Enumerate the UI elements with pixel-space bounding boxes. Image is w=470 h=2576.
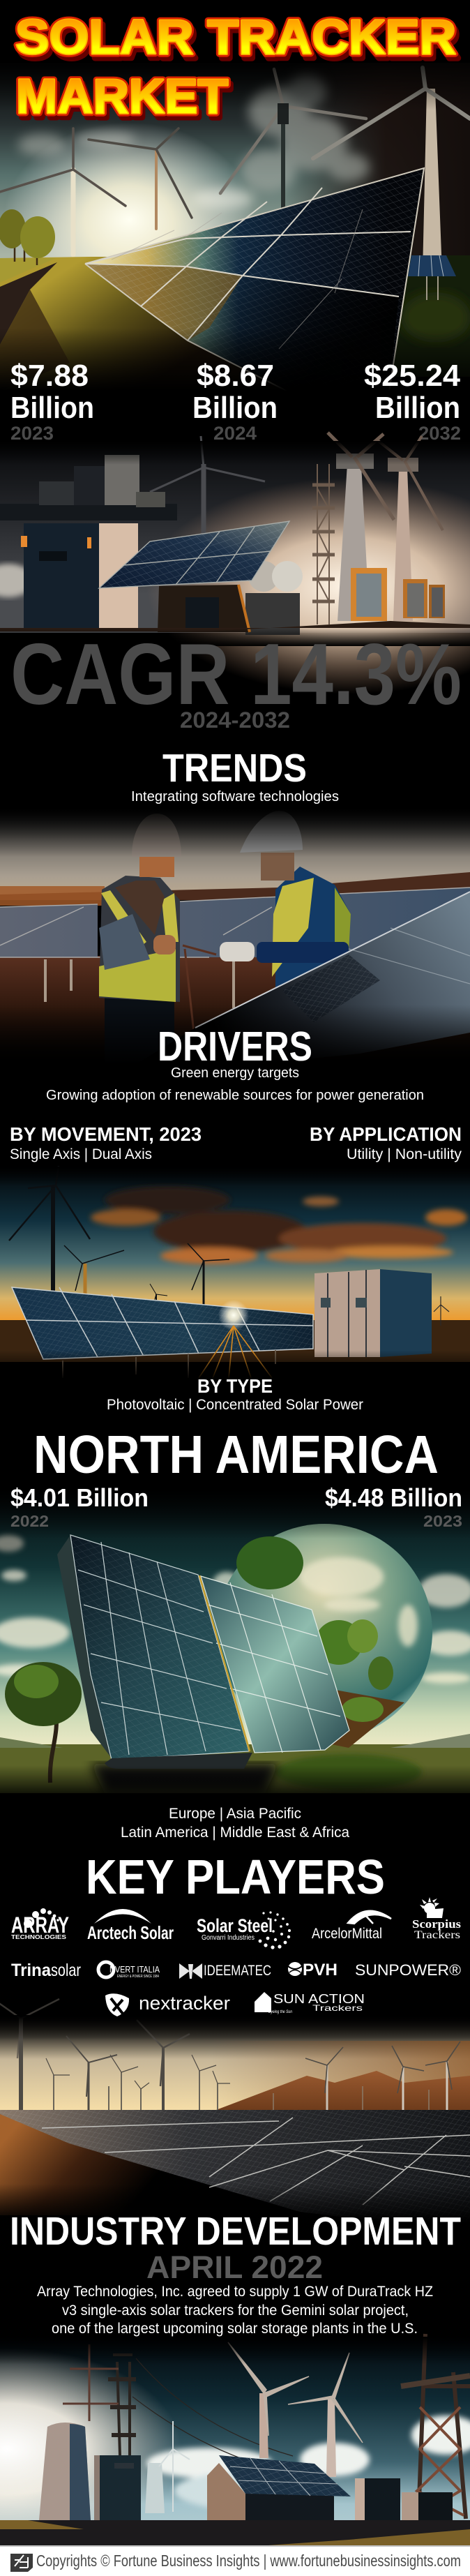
field	[0, 1734, 470, 1793]
logo: scorpius trackers: Scorpius	[412, 1917, 461, 1931]
title shadow	[18, 14, 459, 128]
market value 2023: $7.88	[10, 359, 89, 393]
logo: array technologies: TECHNOLOGIES	[11, 1934, 67, 1940]
solar panel right	[199, 1575, 349, 1753]
drivers heading and text: Green energy targets	[171, 1065, 299, 1081]
ground fade	[0, 1350, 470, 1379]
trends heading and text	[131, 746, 339, 804]
solar panel field	[0, 2110, 470, 2233]
logo: arctech solar: Arctech Solar	[87, 1922, 174, 1943]
top fade	[0, 2337, 470, 2365]
market value 2024: Billion	[192, 391, 278, 425]
top fade	[0, 61, 470, 110]
main solar panel array	[85, 168, 424, 405]
by movement segment	[10, 1123, 202, 1162]
trends heading and text: TRENDS	[162, 746, 307, 791]
title outline	[15, 10, 456, 123]
market value 2032: Billion	[375, 391, 460, 425]
logo: solar steel: Gonvarri Industries	[202, 1934, 255, 1942]
title shadow: SOLAR TRACKER	[18, 14, 459, 68]
wind turbine far left	[0, 128, 126, 255]
by application segment: Utility | Non-utility	[347, 1146, 462, 1162]
title inner stroke: SOLAR TRACKER	[15, 10, 456, 64]
wind turbine large right	[313, 68, 470, 272]
market value 2024	[192, 359, 278, 444]
market value 2024: 2024	[213, 423, 257, 444]
market value 2032: $25.24	[364, 359, 461, 393]
sky	[0, 441, 470, 633]
orange cabinets	[351, 568, 445, 621]
trees	[0, 209, 55, 265]
grass	[0, 2520, 470, 2546]
title inner stroke	[15, 10, 456, 123]
market value 2023: 2023	[10, 423, 54, 444]
bottom fade	[0, 2184, 470, 2222]
industry development description: v3 single-axis solar trackers for the Gemini solar project,	[62, 2302, 409, 2319]
logo: scorpius trackers: Trackers	[414, 1929, 460, 1941]
other regions list	[121, 1806, 349, 1841]
logo: scorpius trackers	[412, 1897, 461, 1941]
tanks and machinery	[245, 561, 303, 635]
logo: ideematec	[179, 1963, 271, 1979]
logo: sun action trackers: SUN ACTION	[273, 1992, 365, 2006]
title: solar tracker market	[15, 10, 459, 128]
ground	[0, 956, 470, 1068]
ground	[0, 2520, 470, 2546]
north america value 2023: $4.48 Billion	[325, 1483, 462, 1512]
north america value 2022: 2022	[10, 1512, 49, 1530]
title inner stroke: MARKET	[16, 69, 228, 123]
tree line	[0, 872, 470, 900]
market value 2032: 2032	[418, 423, 461, 444]
sky	[0, 808, 470, 899]
right warm sky	[0, 2041, 470, 2111]
scene: power grid and storage plant	[0, 2334, 470, 2550]
cooling tower	[145, 2463, 165, 2513]
logo: convert italia	[98, 1962, 160, 1979]
title outline: MARKET	[16, 69, 228, 123]
logo: sun action trackers: Eyeing the Sun	[268, 2010, 293, 2014]
sky	[0, 1167, 470, 1321]
horizon glow	[146, 478, 470, 694]
turbine two	[288, 2353, 363, 2477]
sun glow	[3, 122, 255, 317]
foreground solar panel	[114, 892, 470, 1078]
solar roof house	[207, 2455, 351, 2535]
clouds	[146, 2416, 470, 2510]
small solar panel	[408, 255, 456, 300]
ground fade	[0, 1765, 470, 1800]
market value 2023	[10, 359, 94, 444]
battery container	[314, 1269, 432, 1357]
scene: solar farm at sunset	[0, 1166, 470, 1379]
ground	[0, 621, 470, 631]
logos row one	[11, 1897, 461, 1949]
trends heading and text: Integrating software technologies	[131, 789, 339, 804]
clouds	[0, 1535, 470, 1684]
right lattice tower	[401, 2334, 470, 2519]
turbine one	[228, 2342, 309, 2458]
globe	[216, 1524, 432, 1740]
logo: sun action trackers: Trackers	[312, 2003, 363, 2013]
by type segment: BY TYPE	[197, 1375, 273, 1397]
clouds	[18, 74, 370, 209]
sky	[0, 2337, 470, 2546]
far right turbines	[434, 1296, 449, 1326]
by type segment: Photovoltaic | Concentrated Solar Power	[107, 1397, 363, 1413]
turbine row	[0, 1999, 460, 2110]
sun flare on array	[199, 1300, 272, 1378]
lattice tower with power lines	[63, 2344, 293, 2473]
logo: solar steel: Solar Steel	[197, 1915, 273, 1936]
wind turbine third	[220, 69, 366, 209]
logo: solar steel	[197, 1911, 291, 1949]
solar panel left	[57, 1535, 249, 1760]
turbines	[9, 1166, 229, 1320]
scene: globe and solar panels	[0, 1490, 470, 1800]
large turbines	[328, 433, 443, 621]
ground	[0, 2114, 300, 2215]
logo: convert italia: NVERT ITALIA	[109, 1964, 160, 1975]
other regions list: Europe | Asia Pacific	[169, 1806, 301, 1822]
date: APRIL 2022	[146, 2249, 323, 2285]
sunset clouds	[91, 1186, 467, 1264]
logo: sun action trackers	[255, 1992, 365, 2014]
right cabinets	[355, 2478, 453, 2538]
cable held by engineers	[183, 945, 216, 1033]
drivers heading and text: DRIVERS	[158, 1024, 312, 1070]
market value 2024: $8.67	[197, 359, 274, 393]
market value 2032	[364, 359, 461, 444]
field	[0, 1320, 470, 1362]
north america value 2023: 2023	[423, 1512, 462, 1530]
by movement segment: Single Axis | Dual Axis	[10, 1146, 152, 1162]
solar array	[12, 1287, 313, 1378]
engineer left	[99, 814, 181, 1068]
by type segment	[107, 1375, 363, 1413]
by application segment	[310, 1123, 462, 1162]
drivers heading and text	[46, 1024, 424, 1103]
dark cabinet	[94, 2455, 141, 2527]
left clouds	[0, 564, 33, 597]
logo: ideematec: IDEEMATEC	[204, 1963, 271, 1979]
distant small turbine	[159, 2421, 190, 2512]
logo: trina solar: solar	[51, 1961, 81, 1980]
sky	[0, 2016, 470, 2111]
sky	[0, 1490, 470, 1748]
logos row three	[105, 1992, 365, 2016]
background solar panels	[0, 888, 470, 1008]
scene: engineers at a solar farm	[0, 808, 470, 1085]
globe clouds	[300, 1557, 418, 1647]
solar panel on stand	[99, 521, 289, 632]
footer bar	[0, 2545, 470, 2576]
logo: array technologies: ARRAY	[11, 1912, 69, 1938]
wind turbine second	[89, 128, 192, 229]
right dark sky	[0, 63, 470, 265]
logos row two	[11, 1961, 461, 1980]
logo: arctech solar	[87, 1909, 174, 1943]
faint turbine	[150, 436, 265, 537]
other regions list: Latin America | Middle East & Africa	[121, 1825, 349, 1841]
trees on globe	[236, 1536, 404, 1748]
logo: convert italia: ENERGY & POWER SINCE 1984	[117, 1975, 159, 1979]
north america value 2023	[325, 1483, 462, 1530]
station building	[0, 455, 177, 628]
logo: pvh	[288, 1961, 338, 1979]
scene: wind turbines and solar panels at sunrise	[0, 61, 470, 443]
industry development description: one of the largest upcoming solar storage plants in the U.S.	[52, 2321, 418, 2337]
silo	[39, 2423, 91, 2520]
logo: trina solar	[11, 1961, 81, 1980]
bottom fade	[0, 328, 470, 391]
panel base	[105, 1753, 252, 1769]
scene: wind farm and mountains	[0, 1999, 470, 2341]
market value 2023: Billion	[10, 391, 94, 425]
industry development description	[37, 2284, 433, 2337]
left tree	[5, 1662, 82, 1783]
logo: trina solar: Trina	[11, 1961, 52, 1980]
drivers heading and text: Growing adoption of renewable sources for power generation	[46, 1088, 424, 1103]
engineer right	[220, 811, 351, 989]
key players heading: KEY PLAYERS	[86, 1850, 385, 1904]
industry development description: Array Technologies, Inc. agreed to supply 1 GW of DuraTrack HZ	[37, 2284, 433, 2300]
north america value 2022: $4.01 Billion	[10, 1483, 149, 1512]
title shadow: MARKET	[19, 73, 231, 128]
scene: energy station with turbines	[0, 433, 470, 694]
mountains	[216, 2071, 470, 2110]
logo: pvh: PVH	[303, 1961, 338, 1979]
silo shade	[70, 2424, 91, 2520]
logo: arcelormittal	[312, 1911, 391, 1942]
footer logo	[10, 2554, 33, 2572]
by application segment: BY APPLICATION	[310, 1123, 462, 1145]
left sun glow	[0, 2348, 181, 2550]
road and grass	[0, 255, 470, 419]
logo: array technologies	[11, 1908, 69, 1940]
title gradient line two: MARKET	[16, 69, 228, 123]
bottom fade	[0, 1005, 470, 1064]
logo: nextracker	[105, 1993, 230, 2016]
logo: sunpower: SUNPOWER®	[355, 1961, 461, 1979]
title gradient line one: SOLAR TRACKER	[15, 10, 456, 64]
north america value 2022	[10, 1483, 149, 1530]
logo: arcelormittal: ArcelorMittal	[312, 1926, 382, 1942]
title outline: SOLAR TRACKER	[15, 10, 456, 64]
sky	[0, 63, 470, 265]
CAGR headline: 2024-2032	[180, 707, 290, 733]
lattice tower	[312, 464, 335, 624]
by movement segment: BY MOVEMENT, 2023	[10, 1123, 202, 1145]
logo: nextracker: nextracker	[139, 1993, 230, 2014]
